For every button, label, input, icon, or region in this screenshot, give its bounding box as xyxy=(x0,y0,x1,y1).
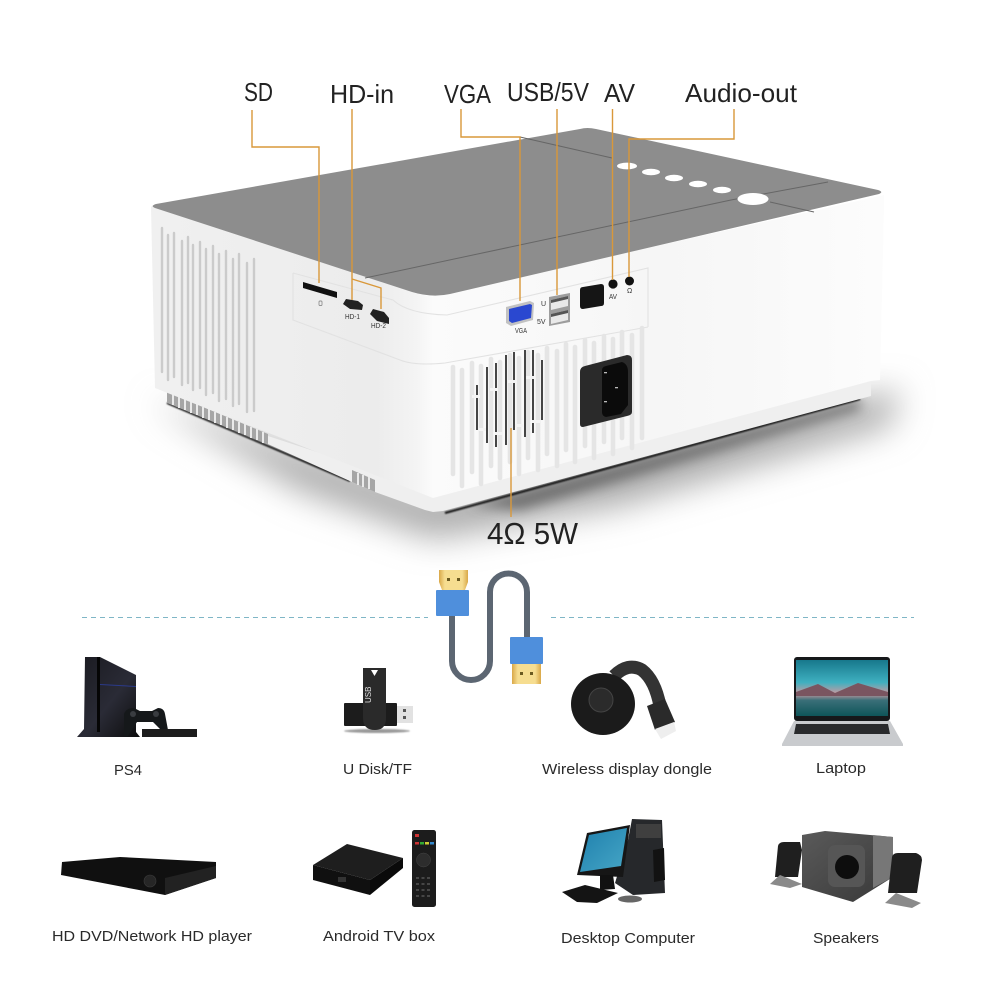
dashed divider left xyxy=(82,616,428,618)
IR window xyxy=(580,284,604,309)
right satellite xyxy=(885,853,922,908)
power socket xyxy=(580,355,632,427)
foot shadow lines xyxy=(167,399,860,513)
label: Audio-out: Audio-out xyxy=(685,78,798,108)
projector illustration xyxy=(150,109,900,538)
swivel text: USB xyxy=(364,687,373,703)
HDMI port 2: HD-2 xyxy=(371,323,386,330)
device: wireless dongle xyxy=(571,667,676,739)
caption: U Disk/TF: U Disk/TF xyxy=(343,761,412,778)
label: USB/5V: USB/5V xyxy=(507,77,590,107)
VGA port xyxy=(506,301,534,335)
caption: Desktop Computer: Desktop Computer xyxy=(561,930,695,947)
body seams xyxy=(293,268,648,364)
projector shadow xyxy=(150,390,900,538)
projector right face xyxy=(433,195,884,498)
lens xyxy=(589,688,613,712)
caption: Speakers: Speakers xyxy=(813,930,879,947)
ribbon xyxy=(614,667,660,706)
shadow xyxy=(344,729,410,733)
HDMI port 1 xyxy=(343,299,363,321)
mouse xyxy=(618,896,642,902)
subwoofer xyxy=(802,831,893,902)
plug xyxy=(647,699,675,730)
projector top panel xyxy=(153,128,881,296)
label: SD: SD xyxy=(244,77,273,107)
camera xyxy=(142,729,197,737)
remote xyxy=(412,830,436,907)
controller xyxy=(124,708,168,736)
caption: Wireless display dongle: Wireless display dongle xyxy=(542,761,712,778)
label: AV: AV xyxy=(604,78,636,108)
callout lines xyxy=(252,109,734,517)
caption: HD DVD/Network HD player: HD DVD/Network HD player xyxy=(52,928,252,945)
keyboard xyxy=(794,724,890,734)
projector foot xyxy=(268,378,871,512)
swivel xyxy=(363,668,386,730)
HDMI cable xyxy=(436,570,543,684)
cable xyxy=(452,574,527,680)
top panel seams xyxy=(365,137,828,278)
top connector xyxy=(436,570,469,616)
side xyxy=(165,866,216,895)
bottom connector xyxy=(510,637,543,684)
projector underside vents xyxy=(167,392,375,492)
left vents xyxy=(162,228,254,412)
caption: PS4: PS4 xyxy=(114,762,142,779)
device: Android TV box xyxy=(313,830,436,907)
device: speakers xyxy=(770,831,922,908)
dashed divider right xyxy=(551,616,914,618)
caption: Laptop: Laptop xyxy=(816,760,866,777)
console xyxy=(77,657,140,737)
puck xyxy=(571,673,635,735)
audio jack: Ω xyxy=(627,288,632,295)
lid xyxy=(794,657,890,721)
device: DVD player xyxy=(61,857,216,895)
left satellite xyxy=(770,842,802,888)
plug xyxy=(397,706,413,723)
device: U disk xyxy=(344,668,413,733)
audio jack xyxy=(625,276,634,295)
HDMI port 2 xyxy=(370,309,389,330)
VGA port: VGA xyxy=(515,328,527,335)
device: laptop xyxy=(782,657,903,746)
label: speaker spec: 4Ω 5W xyxy=(487,516,579,551)
device: PS4 xyxy=(77,657,197,737)
device: desktop computer xyxy=(562,819,665,903)
caption: Android TV box: Android TV box xyxy=(323,928,436,945)
keyboard xyxy=(562,885,618,903)
speaker grille vents xyxy=(453,328,642,486)
AV jack: AV xyxy=(609,294,617,301)
USB ports xyxy=(537,293,570,326)
base xyxy=(782,721,903,746)
monitor xyxy=(577,825,630,890)
label: HD-in: HD-in xyxy=(330,79,394,109)
dial xyxy=(144,875,156,887)
HDMI port 1: HD-1 xyxy=(345,314,360,321)
box xyxy=(313,844,403,895)
case xyxy=(61,857,216,895)
label: VGA: VGA xyxy=(444,79,492,109)
AV jack xyxy=(608,279,618,301)
control buttons xyxy=(617,163,768,205)
USB ports: U xyxy=(541,301,546,308)
projector left face xyxy=(151,205,433,498)
body xyxy=(344,703,397,726)
SD card slot xyxy=(303,282,337,306)
screen xyxy=(796,660,888,716)
tower xyxy=(615,819,665,895)
USB ports: 5V xyxy=(537,319,546,326)
